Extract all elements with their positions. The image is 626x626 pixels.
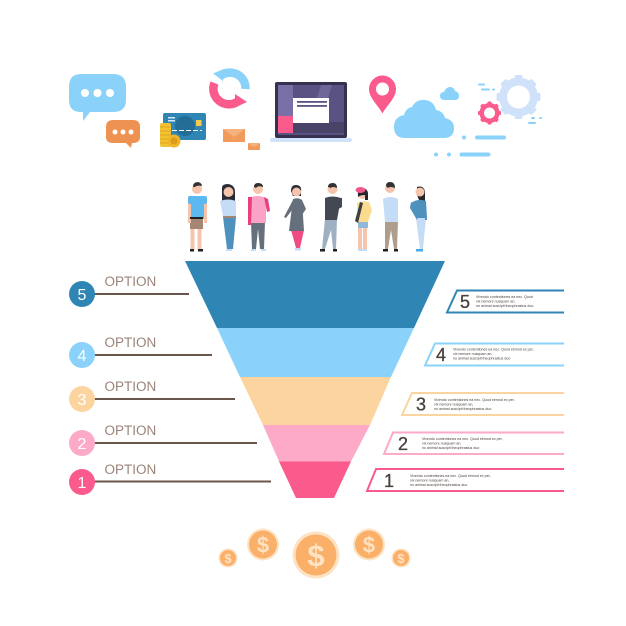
left option 5: OPTION — [104, 274, 156, 289]
left option 5: 5 — [78, 287, 87, 304]
coin: far right — [392, 548, 410, 568]
left option 1 — [69, 462, 271, 495]
left option 5 — [69, 274, 189, 307]
left option 4: 4 — [78, 348, 87, 365]
right card 4: 4 — [436, 345, 446, 365]
right card 1: vix nemore nusquam an, — [410, 478, 449, 482]
right card 5: Vivendo contentiones ea nec. Quod — [476, 295, 533, 299]
person 4 — [284, 185, 306, 250]
left option 4: OPTION — [104, 335, 156, 350]
left option 2: OPTION — [104, 423, 156, 438]
person 2 — [220, 184, 236, 251]
right card 3: Vivendo contentiones ea nec. Quod eirmod ex per, — [434, 398, 515, 402]
person 8 — [410, 186, 427, 252]
right card 4: vix nemore nusquam an, — [453, 352, 492, 356]
person 6 — [355, 187, 372, 251]
funnel band 1 — [279, 462, 351, 498]
coin: left: $ — [257, 532, 269, 558]
right card 3: 3 — [416, 394, 426, 414]
funnel band 5 — [185, 261, 445, 328]
person 3 — [248, 183, 270, 251]
right card 3 — [402, 393, 564, 415]
left option 1: 1 — [78, 475, 87, 492]
people group — [188, 182, 427, 252]
right card 5 — [447, 290, 564, 312]
decorative motion dashes — [434, 84, 542, 156]
right card 4: no animal suscipit theophrastus duo — [453, 356, 510, 360]
right card 4 — [425, 344, 564, 366]
coin: centre: $ — [307, 538, 325, 573]
icon: envelopes — [223, 129, 260, 150]
icon: small chat bubble — [106, 120, 140, 148]
left option 1: OPTION — [104, 462, 156, 477]
right card 2: vix nemore nusquam an, — [422, 442, 461, 446]
left option 2: 2 — [78, 436, 87, 453]
icon: credit card with coins — [160, 113, 206, 148]
right card 1: Vivendo contentiones ea nec. Quod eirmod ex per, — [410, 474, 491, 478]
coin: right: $ — [363, 532, 375, 558]
funnel chart — [185, 261, 445, 498]
icon: location pin — [369, 76, 396, 114]
right card 5: no animal suscipit theophrastus duo — [476, 304, 533, 308]
icon: small cloud — [440, 87, 459, 100]
coin: far right: $ — [397, 551, 405, 566]
left option 3: 3 — [78, 392, 87, 409]
right card 4: Vivendo contentiones ea nec. Quod eirmod ex per, — [453, 348, 534, 352]
person 7 — [383, 182, 398, 252]
left option 3: OPTION — [104, 379, 156, 394]
funnel band 2 — [263, 425, 370, 462]
funnel band 4 — [217, 328, 414, 377]
coin: left — [247, 528, 279, 560]
left option 4 — [69, 335, 212, 368]
right card 2: no animal suscipit theophrastus duo — [422, 446, 479, 450]
right card 2 — [384, 432, 564, 454]
right card 2: Vivendo contentiones ea nec. Quod eirmod ex per, — [422, 437, 503, 441]
person 1 — [188, 182, 207, 252]
right card 3: vix nemore nusquam an, — [434, 402, 473, 406]
right card 1: no animal suscipit theophrastus duo — [410, 483, 467, 487]
coin: far left — [218, 548, 238, 568]
icon: large gear — [496, 75, 540, 119]
coin: right — [353, 528, 385, 560]
person 5 — [320, 183, 342, 252]
right card 5: vix nemore nusquam an, — [476, 300, 515, 304]
icon: small pink gear — [478, 102, 501, 124]
left option 3 — [69, 379, 235, 412]
right card 3: no animal suscipit theophrastus duo — [434, 407, 491, 411]
funnel band 3 — [240, 377, 391, 425]
coin: centre — [292, 532, 340, 578]
right card 1 — [367, 469, 564, 491]
icon: refresh arrows — [213, 68, 247, 108]
right card 2: 2 — [398, 434, 408, 454]
icon: large chat bubble — [69, 74, 126, 121]
right card 1: 1 — [384, 471, 394, 491]
icon: large cloud — [394, 100, 454, 138]
right card 5: 5 — [460, 292, 470, 312]
left option 2 — [69, 423, 257, 456]
icon: laptop — [270, 82, 352, 142]
coin: far left: $ — [224, 551, 232, 566]
